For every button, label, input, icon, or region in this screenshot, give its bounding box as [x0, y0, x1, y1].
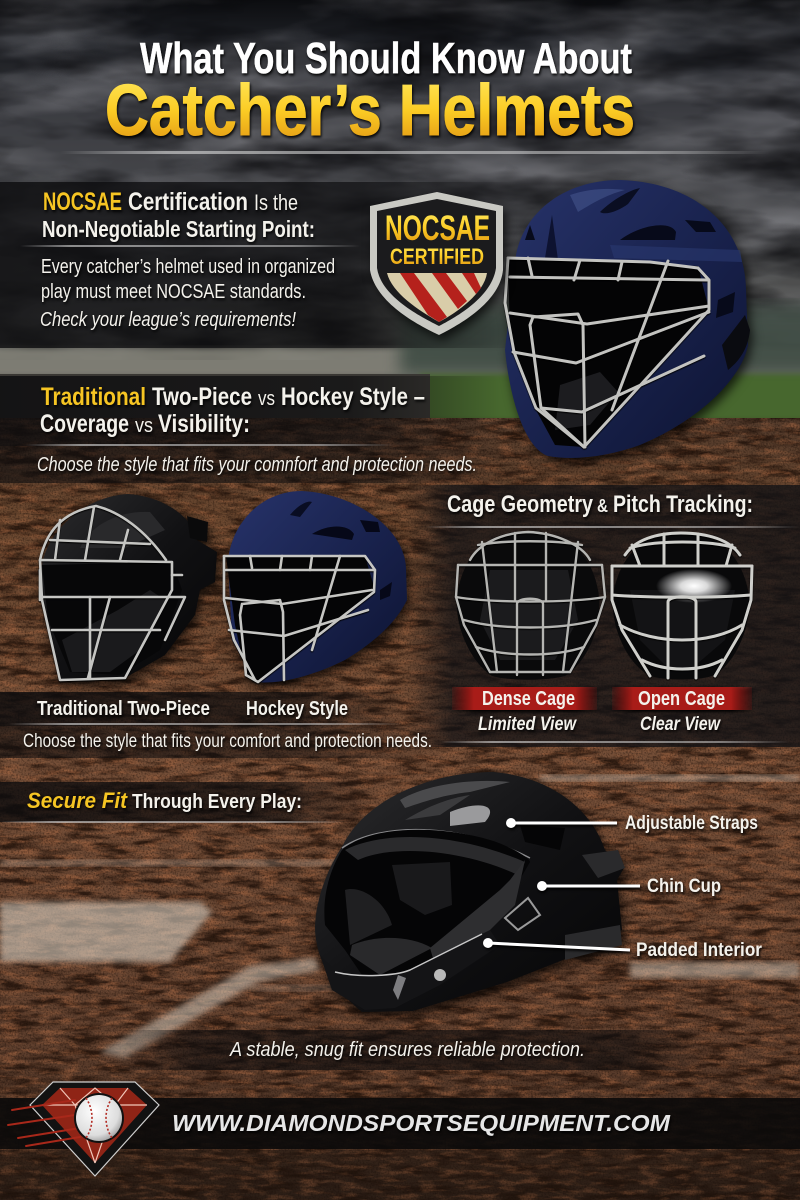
title line 2: Catcher’s Helmets [105, 71, 635, 151]
label: traditional: Traditional Two-Piece [37, 698, 210, 720]
straps and buckle [505, 850, 625, 960]
mask shell [457, 531, 599, 680]
callout: padded interior: Padded Interior [636, 940, 763, 961]
caption: stable fit: A stable, snug fit ensures reliable protection. [229, 1039, 585, 1061]
panels: dark translucent text bands [0, 182, 800, 1070]
title line 1: What You Should Know About [140, 34, 632, 83]
black helmet with interior padding [315, 772, 625, 1012]
traditional two-piece helmet [38, 494, 217, 680]
label: hockey: Hockey Style [246, 698, 348, 720]
callout: chin cup: Chin Cup [647, 876, 721, 897]
heading line 2: Non-Negotiable Starting Point: [42, 216, 315, 242]
badge text [385, 209, 490, 269]
sub labels: Limited View [478, 714, 577, 735]
face opening [226, 556, 375, 682]
badge: NOCSAE certified shield [370, 192, 503, 335]
heading line 1: Is the [254, 190, 298, 215]
heading line 2: Coverage [40, 410, 129, 438]
heading line 1: Traditional [41, 383, 146, 411]
badge text: CERTIFIED [390, 244, 484, 269]
cage labels [452, 687, 752, 735]
sub labels [478, 714, 721, 735]
steel cage [40, 506, 185, 680]
heading: cage geometry [447, 491, 753, 518]
helmet vents and highlights [525, 188, 742, 262]
body copy: Every catcher’s helmet used in organized [41, 256, 335, 278]
heading line 1: NOCSAE [43, 188, 122, 216]
sub labels: Clear View [640, 714, 721, 735]
chalk marks [0, 775, 800, 1058]
heading: secure fit: Secure Fit [27, 788, 129, 813]
dense cage helmet front view [456, 531, 605, 680]
heading: cage geometry: Pitch Tracking: [613, 491, 753, 518]
open wires [612, 533, 752, 678]
heading line 2 [40, 410, 250, 438]
panel: NOCSAE certification text [40, 188, 335, 331]
interior padding [324, 830, 530, 975]
footer bar [0, 1098, 800, 1149]
navy shell [228, 491, 407, 683]
callout: chin cup [537, 876, 721, 897]
steel cage [505, 258, 709, 447]
callout: adjustable straps: Adjustable Straps [625, 813, 758, 834]
heading: cage geometry: Cage Geometry [447, 491, 594, 518]
baseball [74, 1093, 124, 1143]
heading line 2: vs [135, 415, 153, 437]
helmet shell [505, 180, 748, 458]
glare: pitch tracking [656, 569, 732, 603]
flag stripes [387, 273, 487, 322]
heading line 1 [43, 188, 298, 216]
red band: open: Open Cage [638, 688, 725, 710]
shell [315, 772, 624, 1012]
heading line 1: Certification [128, 188, 248, 216]
heading line 1: Hockey Style – [281, 383, 425, 411]
dense wires [456, 532, 605, 675]
badge text: NOCSAE [385, 209, 490, 248]
heading: secure fit [27, 788, 302, 813]
heading: secure fit: Through Every Play: [132, 791, 302, 813]
website url: WWW.DIAMONDSPORTSEQUIPMENT.COM [172, 1110, 671, 1136]
title [105, 34, 635, 151]
callout: adjustable straps [506, 813, 758, 834]
caption: Choose the style that fits your comfort and protection needs. [23, 731, 432, 752]
panel: style comparison text [37, 383, 477, 476]
callout: check league: Check your league’s requirements! [40, 309, 296, 331]
black shell [38, 494, 217, 680]
heading line 1: Two-Piece [152, 383, 252, 411]
caption: Choose the style that fits your comnfort and protection needs. [37, 454, 477, 476]
heading line 2: Visibility: [158, 410, 250, 438]
logo: diamond with baseball [8, 1082, 159, 1176]
mask shell [613, 532, 749, 680]
face opening [508, 258, 709, 447]
hockey style helmet [224, 491, 407, 683]
chin guard rim [320, 930, 500, 1010]
speed streaks [8, 1100, 80, 1146]
body copy: play must meet NOCSAE standards. [41, 281, 306, 303]
open cage helmet front view [612, 532, 752, 680]
navy catcher's helmet [505, 180, 750, 458]
body copy [41, 256, 335, 303]
panel: style labels [23, 698, 432, 752]
heading line 1 [41, 383, 425, 411]
steel cage [224, 556, 375, 682]
red band: dense: Dense Cage [482, 688, 575, 710]
callout: padded interior [483, 938, 763, 961]
callouts: fit features [483, 813, 763, 961]
heading line 1: vs [258, 388, 275, 410]
heading: cage geometry: & [597, 496, 608, 516]
